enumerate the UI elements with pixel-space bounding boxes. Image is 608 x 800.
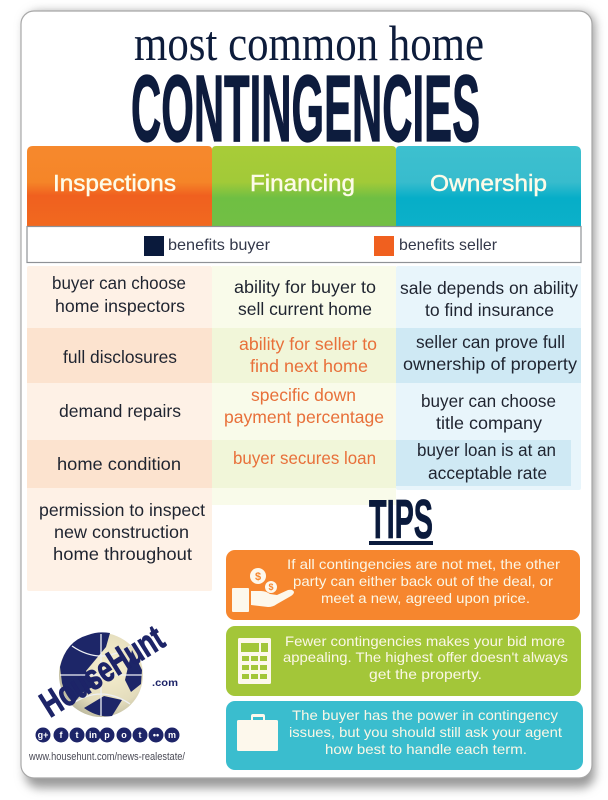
item: sale depends: to find insurance — [425, 300, 554, 320]
item: buyer loan: buyer loan is at an — [417, 440, 556, 460]
column headers — [27, 146, 581, 226]
icon: briefcase — [237, 714, 278, 751]
item: ability for buyer: sell current home — [238, 299, 372, 319]
icon: globe — [59, 632, 143, 717]
item: sale depends — [400, 278, 578, 320]
social icons: p — [104, 730, 110, 740]
logo wordmark: HouseHunt — [33, 617, 171, 725]
item: permission to inspect: permission to inspect — [39, 500, 205, 520]
tip text: issues, but you should still ask your agent — [289, 724, 562, 740]
tip text: how best to handle each term. — [325, 741, 527, 757]
tip text — [283, 633, 568, 682]
legend — [27, 226, 581, 262]
item: specific down payment: specific down — [251, 385, 356, 405]
legend: benefits seller — [374, 236, 498, 256]
item: buyer can choose title — [421, 391, 556, 433]
social icons: g+ — [38, 730, 48, 740]
financing background — [212, 266, 396, 505]
item: seller can prove: ownership of property — [403, 354, 577, 374]
item: full disclosures: full disclosures — [63, 347, 177, 367]
icon: hand with coins: $ — [268, 582, 274, 592]
item: ability for buyer: ability for buyer to — [234, 277, 376, 297]
social icons: t — [138, 730, 142, 740]
tip text: meet a new, agreed upon price. — [321, 590, 530, 606]
tip text: Fewer contingencies makes your bid more — [285, 633, 565, 649]
item: permission to inspect: new construction — [54, 522, 189, 542]
logo: househunt — [33, 617, 178, 725]
tip text — [289, 707, 562, 757]
tip text: The buyer has the power in contingency — [292, 707, 558, 723]
tip: green — [226, 626, 581, 696]
social icons: o — [121, 730, 127, 740]
tips heading — [369, 488, 433, 550]
social icons: f — [60, 730, 64, 740]
title line one: most common home — [134, 15, 484, 71]
column: ownership — [396, 266, 581, 490]
inspections background — [27, 266, 212, 591]
item: buyer loan: acceptable rate — [428, 463, 547, 483]
tips heading: TIPS — [369, 488, 433, 550]
item: seller can prove: seller can prove full — [416, 332, 565, 352]
item: home condition: home condition — [57, 454, 181, 474]
header: inspections — [27, 146, 212, 226]
tip: orange — [226, 550, 580, 620]
item: ability for seller: ability for seller to — [239, 334, 377, 354]
item: ability for seller: find next home — [250, 356, 368, 376]
header: ownership — [396, 146, 581, 226]
social icons: •• — [153, 730, 159, 740]
tip text: appealing. The highest offer doesn't always — [283, 649, 568, 665]
item: demand repairs: demand repairs — [59, 401, 181, 421]
item: buyer loan — [417, 440, 556, 483]
item: seller can prove — [403, 332, 577, 374]
tip: teal — [226, 701, 583, 770]
icon: hand with coins — [232, 568, 294, 612]
legend: benefits seller: benefits seller — [399, 237, 498, 254]
legend: benefits buyer — [144, 236, 271, 256]
logo .com: .com — [152, 677, 178, 689]
column: financing — [212, 266, 396, 505]
header: financing: Financing — [250, 170, 355, 196]
item: buyer can choose title: title company — [436, 413, 542, 433]
social icons: m — [168, 730, 176, 740]
item: buyer can choose home inspectors — [52, 273, 186, 316]
header: financing — [212, 146, 396, 226]
header: ownership: Ownership — [430, 170, 547, 196]
header: inspections: Inspections — [53, 170, 176, 196]
tip text: get the property. — [369, 666, 482, 682]
title — [131, 15, 484, 162]
item: specific down payment: payment percentage — [224, 407, 384, 427]
ownership background — [396, 266, 581, 490]
tip text: If all contingencies are not met, the other — [287, 556, 560, 572]
item: ability for buyer — [234, 277, 376, 319]
legend: benefits buyer: benefits buyer — [168, 237, 271, 254]
icon: calculator — [238, 638, 271, 684]
item: sale depends: sale depends on ability — [400, 278, 578, 298]
website url: www.househunt.com/news-realestate/ — [28, 751, 186, 763]
tip text — [287, 556, 560, 606]
item: buyer can choose home inspectors: home inspectors — [55, 296, 185, 316]
item: buyer can choose title: buyer can choose — [421, 391, 556, 411]
item: permission to inspect: home throughout — [53, 544, 192, 564]
item: ability for seller — [239, 334, 377, 376]
social icons — [36, 728, 180, 742]
item: specific down payment — [224, 385, 384, 427]
tip text: party can either back out of the deal, or — [293, 573, 553, 589]
item: buyer can choose home inspectors: buyer can choose — [52, 273, 186, 293]
social icons: in — [89, 730, 97, 740]
item: buyer secures loan: buyer secures loan — [233, 448, 376, 468]
column: inspections — [27, 266, 212, 591]
item: permission to inspect — [39, 500, 205, 564]
social icons: t — [76, 730, 78, 740]
icon: hand with coins: $ — [255, 571, 261, 583]
